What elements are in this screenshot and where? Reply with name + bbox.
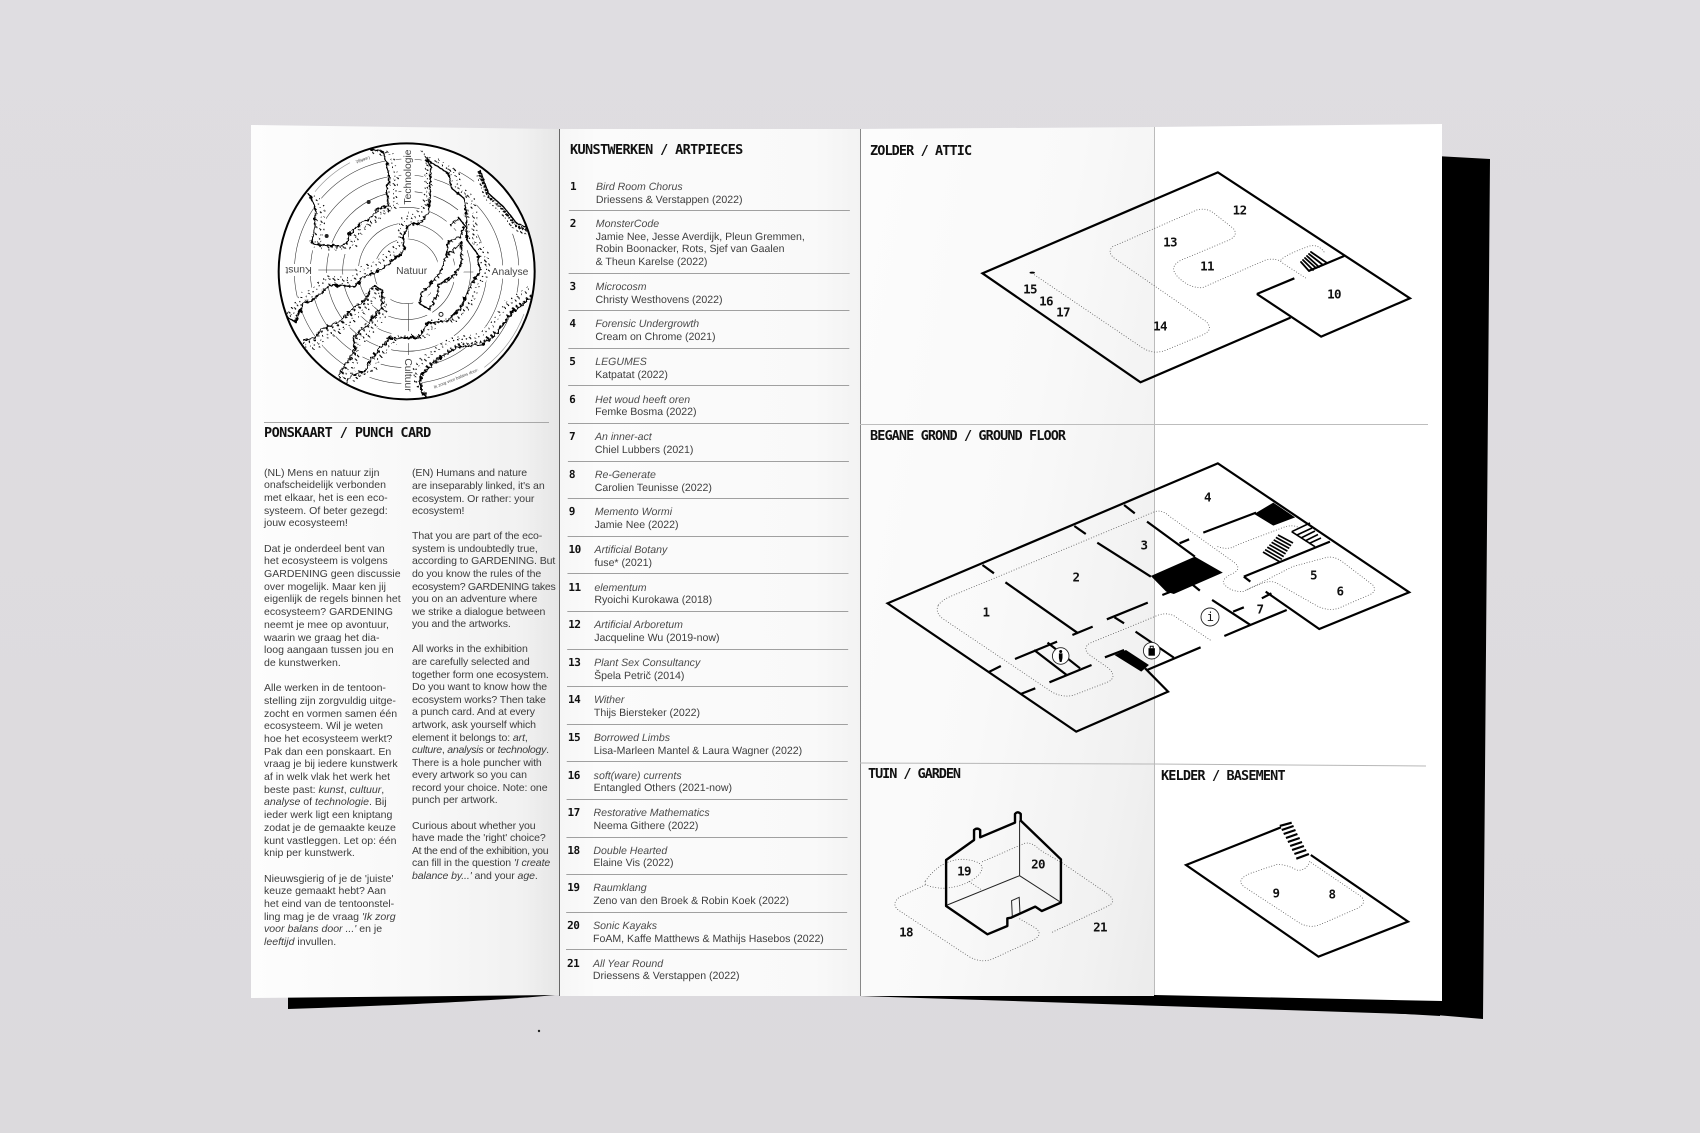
room numbers: 4	[1204, 490, 1211, 504]
thin name and age arcs	[315, 163, 524, 367]
text: English introduction: system is undoubtedly true,	[412, 543, 538, 555]
artwork list: Christy Westhovens (2022)	[595, 294, 723, 306]
artwork list: Forensic Undergrowth	[595, 319, 699, 331]
punch card wheel diagram	[278, 142, 536, 400]
artwork list: 11	[568, 581, 581, 594]
room numbers: 11	[1200, 258, 1214, 274]
artwork list: Špela Petrič (2014)	[594, 670, 684, 682]
axis labels: Kunst	[285, 264, 312, 275]
room numbers: 2	[1073, 570, 1080, 584]
artwork list: Thijs Biersteker (2022)	[594, 707, 700, 719]
artwork list: Sonic Kayaks	[593, 920, 657, 932]
text: Dutch introduction: met elkaar, het is een eco-	[264, 492, 388, 504]
text: English introduction: ecosystem works? Then take	[412, 694, 546, 706]
text: Dutch introduction: vraag je bij iedere kunstwerk	[264, 758, 398, 770]
text: Dutch introduction: zocht en vormen samen één	[264, 708, 397, 720]
artwork list: Entangled Others (2021-now)	[594, 783, 732, 795]
artwork list: Jacqueline Wu (2019-now)	[594, 632, 720, 644]
artwork list: 19	[567, 882, 580, 895]
text: Dutch introduction: voor balans door ...' en je	[264, 923, 382, 935]
artwork list: 3	[570, 280, 576, 293]
artwork list: 18	[567, 844, 580, 857]
coast lines and stipple	[282, 149, 534, 397]
artwork list: 10	[569, 543, 581, 556]
text: English introduction: ecosystem!	[412, 505, 464, 517]
text: Dutch introduction: systeem. Of beter gezegd:	[264, 505, 388, 517]
artwork list: & Theun Karelse (2022)	[596, 256, 707, 268]
punch marks	[325, 200, 443, 316]
artwork list: Raumklang	[593, 883, 647, 895]
text: Dutch introduction: waarin we graag het dia-	[264, 632, 380, 644]
artwork list: fuse* (2021)	[594, 557, 652, 569]
text: Dutch introduction: ecosysteem? GARDENING	[264, 606, 393, 618]
text: Dutch introduction: kunt vastleggen. Let op: één	[264, 835, 397, 847]
black service blocks	[1114, 503, 1295, 672]
artwork list: 8	[569, 468, 575, 481]
stairs to attic	[1292, 523, 1321, 547]
axis labels: Cultuur	[402, 358, 413, 392]
text: Dutch introduction: knip per kunstwerk.	[264, 847, 355, 859]
artwork list: LEGUMES	[595, 356, 647, 368]
text: Dutch introduction: zodat je de gemaakte keuze	[264, 822, 396, 834]
artwork list: Ryoichi Kurokawa (2018)	[594, 595, 712, 607]
text: Dutch introduction: GARDENING geen discussie	[264, 568, 401, 580]
axis labels: Ik zorg voor balans door:	[433, 367, 479, 390]
artwork list: 21	[567, 957, 579, 970]
artwork list: Restorative Mathematics	[594, 807, 710, 819]
room numbers: 1	[983, 604, 990, 620]
text: English introduction: every artwork so you can	[412, 769, 527, 781]
text: Dutch introduction: jouw ecosysteem!	[264, 517, 348, 529]
text: English introduction: balance by...' and your age.	[412, 870, 538, 882]
artwork list: soft(ware) currents	[594, 770, 682, 782]
text: Dutch introduction: de kunstwerken.	[264, 657, 341, 669]
text: English introduction: are carefully selected and	[412, 656, 530, 668]
floor plan: ground floor	[885, 462, 1412, 733]
stairs	[1301, 252, 1327, 271]
text: Dutch introduction: Alle werken in de tentoon-	[264, 682, 386, 694]
basement numbers: 8	[1329, 886, 1336, 902]
room numbers: 5	[1310, 568, 1317, 582]
room numbers: 14	[1153, 318, 1167, 334]
text: English introduction: culture, analysis or technology.	[412, 744, 549, 756]
text: Dutch introduction: Nieuwsgierig of je de 'juiste'	[264, 873, 393, 885]
text: English introduction: Curious about whether you	[412, 820, 536, 832]
text: Dutch introduction: ling mag je de vraag 'Ik zorg	[264, 911, 396, 923]
heading: ground floor: BEGANE GROND / GROUND FLOOR	[870, 428, 1065, 444]
text: English introduction: do you know the rules of the	[412, 568, 541, 580]
text: Dutch introduction: leeftijd invullen.	[264, 936, 336, 948]
artwork list: Carolien Teunisse (2022)	[595, 482, 712, 494]
text: English introduction: are inseparably linked, it's an	[412, 480, 545, 492]
text: English introduction: you and the artworks.	[412, 618, 511, 630]
garden numbers: 20	[1031, 856, 1045, 872]
artwork list: 2	[570, 217, 576, 230]
artwork list: 4	[569, 318, 576, 331]
text: Dutch introduction: het ecosysteem is volgens	[264, 555, 388, 567]
text: English introduction: element it belongs to: art,	[412, 732, 528, 744]
text: English introduction: Do you want to know how the	[412, 681, 547, 693]
text: Dutch introduction: Pak dan een ponskaart. En	[264, 746, 391, 758]
text: English introduction	[412, 468, 556, 881]
text: English introduction: according to GARDENING. But	[412, 555, 555, 567]
icon: information	[1201, 608, 1219, 626]
room numbers: 10	[1327, 286, 1341, 302]
garden numbers: 18	[899, 924, 913, 940]
basement numbers	[1273, 886, 1336, 902]
icon: cloakroom lock	[1143, 642, 1160, 659]
artwork list: Robin Boonacker, Rots, Sjef van Gaalen	[596, 244, 785, 256]
text: English introduction: artwork, ask yourself which	[412, 719, 536, 731]
artwork list: Het woud heeft oren	[595, 394, 690, 406]
room numbers: 3	[1141, 538, 1148, 552]
text: Dutch introduction: het eind van de tentoonstel-	[264, 898, 394, 910]
text: English introduction: All works in the exhibition	[412, 643, 528, 655]
text: Dutch introduction: af in welk vlak het werk het	[264, 771, 390, 783]
rings	[294, 159, 519, 384]
artwork list: Bird Room Chorus	[596, 182, 683, 194]
text: Dutch introduction: neemt je mee op avontuur,	[264, 619, 389, 631]
artwork list: Memento Wormi	[595, 507, 672, 519]
artwork list: 6	[569, 393, 575, 406]
artwork list: 7	[569, 431, 575, 444]
basement numbers: 9	[1273, 886, 1280, 900]
text: Dutch introduction: ecosysteem. Wil je weten	[264, 720, 383, 732]
axis labels: Natuur	[396, 266, 428, 277]
outer rim	[279, 143, 535, 399]
artwork list: Jamie Nee, Jesse Averdijk, Pleun Gremmen,	[596, 231, 805, 243]
artwork list: Jamie Nee (2022)	[595, 519, 679, 531]
text: English introduction: together form one ecosystem.	[412, 669, 549, 681]
garden numbers: 19	[957, 864, 971, 878]
room numbers: 16	[1039, 294, 1053, 308]
panel: left maps fold	[860, 127, 1154, 996]
artwork list: 15	[568, 731, 580, 744]
heading: attic: ZOLDER / ATTIC	[870, 143, 971, 159]
artwork list: Wither	[594, 695, 624, 707]
panel: right maps fold	[1154, 124, 1442, 1001]
heading: artpieces: KUNSTWERKEN / ARTPIECES	[570, 142, 743, 158]
text: Dutch introduction: eigenlijk de regels binnen het	[264, 593, 401, 605]
artwork list: 17	[568, 806, 580, 819]
artwork list: Katpatat (2022)	[595, 369, 668, 381]
artwork list: 20	[567, 919, 579, 932]
map: basement	[1184, 822, 1410, 958]
garden numbers	[899, 856, 1107, 940]
map: garden	[894, 811, 1113, 962]
text: Dutch introduction: ieder werk ligt een kniptang	[264, 809, 392, 821]
artwork list: All Year Round	[593, 958, 663, 970]
artwork list: Cream on Chrome (2021)	[595, 331, 716, 343]
artwork list: Artificial Arboretum	[594, 620, 683, 632]
text: English introduction: punch per artwork.	[412, 794, 498, 806]
text: Dutch introduction: (NL) Mens en natuur zijn	[264, 467, 379, 479]
artwork list: Artificial Botany	[595, 544, 667, 556]
text: English introduction: That you are part of the eco-	[412, 530, 542, 542]
visitor route	[938, 511, 1374, 609]
text: Dutch introduction: keuze gemaakt hebt? Aan	[264, 885, 386, 897]
artwork list: Lisa-Marleen Mantel & Laura Wagner (2022)	[594, 745, 802, 757]
text: English introduction: can fill in the question 'I create	[412, 857, 550, 869]
text: Dutch introduction: onafscheidelijk verbonden	[264, 479, 386, 491]
axis labels: Technologie	[403, 149, 414, 205]
artwork list: Femke Bosma (2022)	[595, 407, 697, 419]
icon: toilets	[1052, 648, 1069, 664]
artwork list: Double Hearted	[593, 845, 667, 857]
artwork list: 1	[570, 181, 576, 194]
text: English introduction: you on an adventure where	[412, 593, 537, 605]
text: English introduction: There is a hole puncher with	[412, 757, 542, 769]
artwork list: Microcosm	[596, 281, 647, 293]
garden numbers: 21	[1093, 920, 1107, 934]
room numbers: 12	[1233, 202, 1247, 218]
room numbers	[1023, 202, 1341, 334]
text: Dutch introduction: Dat je onderdeel bent van	[264, 543, 385, 555]
artwork list: Elaine Vis (2022)	[593, 858, 674, 870]
artwork list: MonsterCode	[596, 218, 659, 230]
room numbers: 7	[1257, 602, 1264, 616]
text: English introduction: ecosystem. Or rather: your	[412, 493, 534, 505]
panel: punch card	[251, 125, 559, 998]
artwork list: An inner-act	[595, 432, 652, 444]
artwork list: 5	[569, 355, 575, 368]
stairs	[1263, 535, 1293, 562]
artwork list: Driessens & Verstappen (2022)	[596, 194, 743, 206]
axis label clear zones and axes	[294, 158, 520, 384]
artwork list: Chiel Lubbers (2021)	[595, 444, 693, 456]
room numbers: 6	[1337, 584, 1344, 598]
divider: ground floor	[860, 424, 1428, 425]
text: English introduction: At the end of the exhibition, you	[412, 845, 548, 857]
artwork list: Re-Generate	[595, 469, 656, 481]
axis labels: Leeftijd:	[355, 155, 371, 165]
text: English introduction: ecosystem? GARDENING takes	[412, 581, 555, 593]
text: Dutch introduction: stelling zijn zorgvuldig uitge-	[264, 695, 396, 707]
axis labels: Analyse	[492, 267, 529, 278]
text: Dutch introduction: beste past: kunst, cultuur,	[264, 784, 384, 796]
floor plan: attic	[980, 171, 1412, 384]
text: Dutch introduction: analyse of technologie. Bij	[264, 796, 387, 808]
axis labels	[285, 149, 529, 392]
heading: garden: TUIN / GARDEN	[868, 766, 960, 782]
text: Dutch introduction	[264, 468, 401, 947]
artwork list: 12	[568, 619, 581, 632]
panel: artpieces list	[559, 129, 860, 996]
artwork list: 16	[568, 769, 580, 782]
artwork list: 9	[569, 506, 575, 519]
text: English introduction: we strike a dialogue between	[412, 606, 545, 618]
text: English introduction: have made the 'right' choice?	[412, 832, 546, 844]
artwork list: FoAM, Kaffe Matthews & Mathijs Hasebos (2022)	[593, 933, 824, 945]
room numbers: 15	[1023, 282, 1037, 296]
artwork list: Plant Sex Consultancy	[594, 657, 700, 669]
room numbers: 13	[1163, 234, 1177, 250]
room numbers	[983, 490, 1344, 620]
artwork list: Driessens & Verstappen (2022)	[593, 971, 740, 983]
artwork list: Zeno van den Broek & Robin Koek (2022)	[593, 895, 789, 907]
artwork list: 13	[568, 656, 580, 669]
text: Dutch introduction: hoe het ecosysteem werkt?	[264, 733, 392, 745]
text: Dutch introduction: loog aangaan tussen jou en	[264, 644, 394, 656]
punch card rule and heading: PONSKAART / PUNCH CARD	[264, 425, 431, 441]
icon: information: i	[1207, 610, 1214, 624]
artwork list: 14	[568, 694, 580, 707]
text: English introduction: record your choice. Note: one	[412, 782, 547, 794]
artwork list	[566, 181, 850, 983]
text: English introduction: (EN) Humans and nature	[412, 467, 527, 479]
artwork list: elementum	[594, 582, 647, 594]
text: English introduction: a punch card. And at every	[412, 706, 535, 718]
heading: basement: KELDER / BASEMENT	[1161, 768, 1285, 784]
text: Dutch introduction: over mogelijk. Maar ken jij	[264, 581, 386, 593]
artwork list: Neema Githere (2022)	[593, 820, 698, 832]
room numbers: 17	[1056, 304, 1070, 320]
artwork list: Borrowed Limbs	[594, 732, 670, 744]
